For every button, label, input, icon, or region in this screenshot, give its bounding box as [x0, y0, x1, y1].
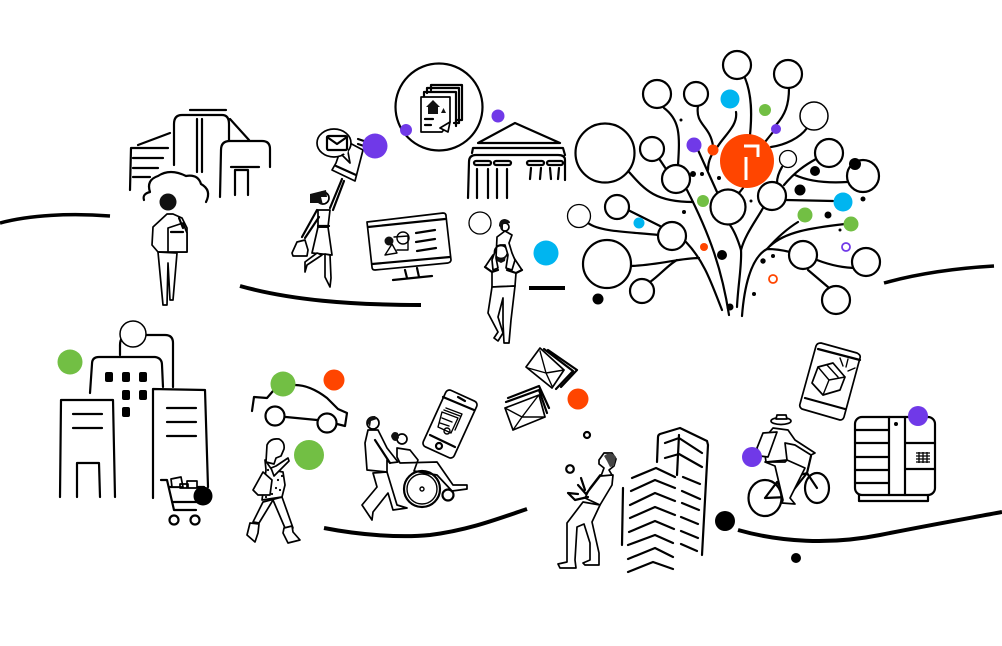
icon: purple dot on locker — [908, 406, 928, 426]
figure: person walking seen from behind — [152, 194, 187, 305]
icon: phone with certificate — [422, 389, 478, 459]
icon: black dot below tree — [592, 294, 604, 304]
icon: car — [252, 385, 347, 432]
icon: computer monitor — [367, 213, 451, 280]
figure: man juggling — [558, 432, 616, 568]
icon: purple dot on cyclist — [742, 447, 762, 467]
icon: orange dot by envelopes — [568, 388, 588, 410]
icon: tall building — [622, 428, 708, 572]
icon: green dot by towers — [58, 350, 82, 374]
icon: black dot under ground line — [791, 553, 801, 563]
figure: woman walking with phone — [247, 439, 300, 543]
figure: cyclist with backpack — [748, 415, 829, 516]
ground lines — [0, 215, 1002, 541]
icon: office buildings with cloud — [130, 110, 270, 202]
icon: blue dot by father — [534, 240, 558, 266]
figure: father carrying child on shoulders — [485, 219, 522, 343]
figure: man pushing woman in wheelchair — [362, 416, 467, 520]
icon: phone with parcel — [800, 343, 860, 420]
figure: woman lifted by phone — [292, 129, 364, 287]
icon: purple dot by phone — [362, 134, 388, 158]
icon: city towers — [60, 321, 208, 498]
chart: branching network tree — [568, 51, 880, 316]
icon: orange logo circle — [720, 134, 774, 188]
icon: purple dot on circle — [400, 124, 412, 136]
icon: white circle near father — [469, 212, 491, 234]
icon: large green dot — [294, 440, 324, 470]
icon: parcel locker — [855, 417, 935, 501]
icon: government building — [468, 123, 565, 198]
icon: shopping cart — [161, 477, 212, 524]
icon: orange dot by car — [324, 370, 344, 390]
icon: green dot on car — [270, 372, 296, 396]
icon: black dot by tall building — [715, 511, 735, 531]
icon: purple dot by temple — [492, 110, 504, 122]
icon: documents in circle — [396, 64, 482, 150]
icon: envelope stacks — [505, 348, 577, 430]
